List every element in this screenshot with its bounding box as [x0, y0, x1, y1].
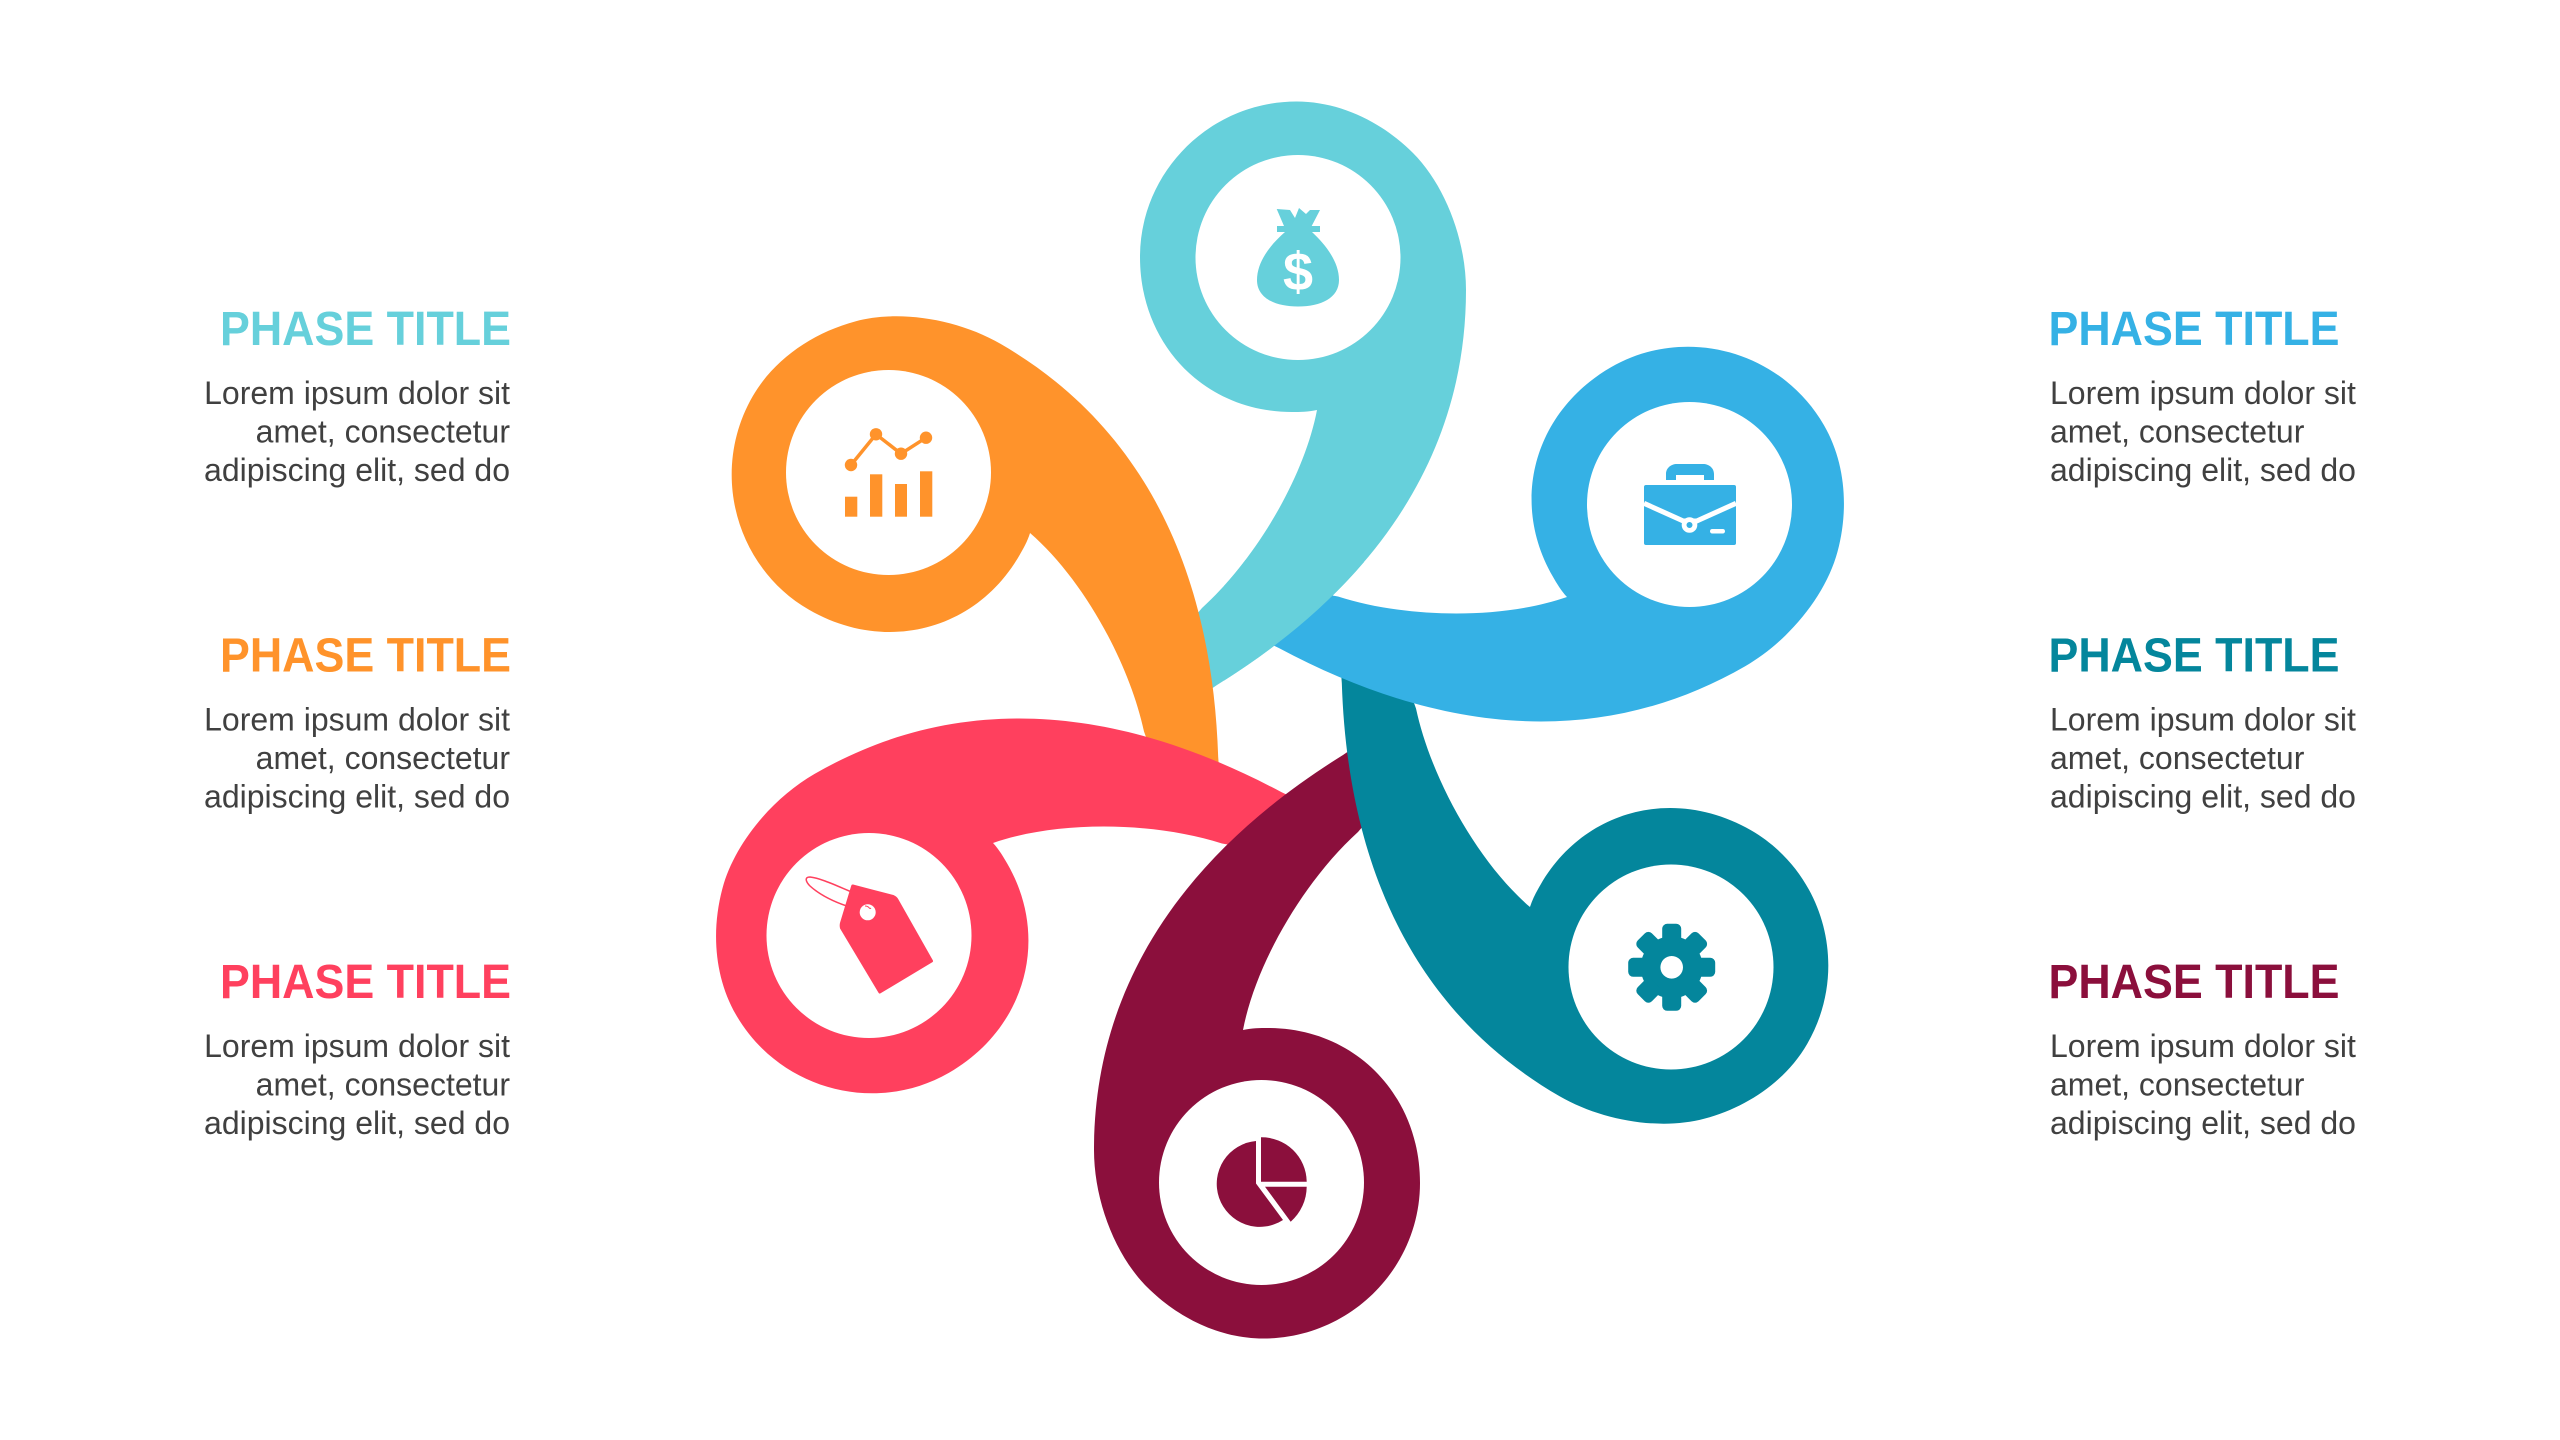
panel: left phase text, cyan: amet, consectetur — [256, 413, 510, 449]
panel: right phase text, maroon: adipiscing elit, sed do — [2050, 1105, 2356, 1141]
icon: briefcase — [1644, 464, 1736, 545]
panel: left phase text, orange: adipiscing elit, sed do — [204, 778, 510, 814]
panel: left phase text, red — [204, 956, 511, 1141]
panel: right phase text, dark teal: adipiscing elit, sed do — [2050, 778, 2356, 814]
panel: right phase text, maroon — [2048, 956, 2356, 1141]
panel: left phase text, cyan — [204, 303, 511, 488]
panel: right phase text, maroon: PHASE TITLE — [2048, 956, 2340, 1009]
panel: left phase text, red: adipiscing elit, sed do — [204, 1105, 510, 1141]
panel: right phase text, dark teal: Lorem ipsum dolor sit — [2050, 702, 2356, 738]
panel: left phase text, orange: Lorem ipsum dolor sit — [204, 702, 510, 738]
icon: money bag: $ — [1283, 242, 1313, 302]
icon: gear — [1628, 924, 1715, 1011]
panel: right phase text, blue: PHASE TITLE — [2048, 303, 2340, 356]
panel: right phase text, blue — [2048, 303, 2356, 488]
icon: money bag — [1257, 208, 1339, 306]
panel: left phase text, orange: PHASE TITLE — [220, 630, 511, 682]
panel: left phase text, red: Lorem ipsum dolor sit — [204, 1028, 510, 1064]
icon: price tag — [806, 877, 932, 992]
petal: orange with chart — [674, 250, 1356, 831]
panel: right phase text, blue: adipiscing elit, sed do — [2050, 452, 2356, 488]
panel: left phase text, cyan: PHASE TITLE — [220, 303, 511, 356]
petal: maroon with pie chart — [1094, 740, 1420, 1338]
panel: left phase text, cyan: adipiscing elit, sed do — [204, 452, 510, 488]
panel: right phase text, maroon: Lorem ipsum dolor sit — [2050, 1028, 2356, 1064]
panel: left phase text, red: amet, consectetur — [256, 1066, 510, 1102]
panel: right phase text, blue: Lorem ipsum dolor sit — [2050, 375, 2356, 411]
petal: cyan with money bag — [1140, 102, 1466, 700]
panel: left phase text, red: PHASE TITLE — [220, 956, 511, 1009]
panel: right phase text, dark teal: amet, consectetur — [2050, 740, 2305, 776]
petal: blue with briefcase — [1227, 290, 1909, 871]
panel: right phase text, blue: amet, consectetur — [2050, 413, 2305, 449]
panel: right phase text, dark teal — [2048, 630, 2356, 814]
panel: left phase text, cyan: Lorem ipsum dolor sit — [204, 375, 510, 411]
icon: pie chart — [1217, 1137, 1307, 1227]
petal: red with price tag — [651, 569, 1333, 1150]
panel: right phase text, dark teal: PHASE TITLE — [2048, 630, 2340, 682]
panel: left phase text, orange: amet, consectetur — [256, 740, 510, 776]
icon: bar and line chart — [845, 428, 932, 517]
panel: left phase text, orange — [204, 630, 511, 814]
petal: dark teal with gear — [1204, 609, 1886, 1190]
panel: right phase text, maroon: amet, consectetur — [2050, 1066, 2305, 1102]
